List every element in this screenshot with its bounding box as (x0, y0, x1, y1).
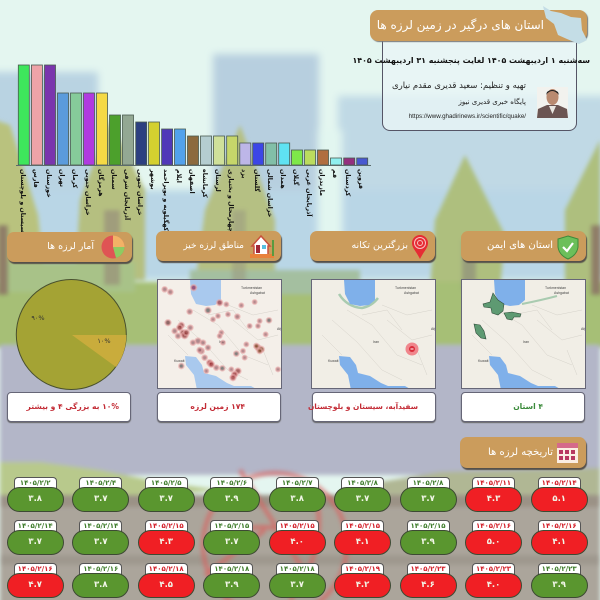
bar chart: earthquakes by province: لرستان (214, 169, 221, 192)
row 3: ۴.۷ (28, 580, 42, 590)
header: seismic zones: مناطق لرزه خیز (183, 241, 244, 251)
row 2: ۴.۱ (356, 537, 369, 547)
row 2: ۳.۷ (94, 537, 108, 547)
map: seismic zones: Turkmenistan (241, 286, 262, 290)
row 3: ۴.۶ (421, 580, 435, 590)
map: safe provinces (461, 279, 586, 389)
row 1: ۱۴۰۵/۲/۸ (413, 478, 443, 486)
row 3: ۱۴۰۵/۲/۱۹ (345, 565, 380, 573)
row 2: ۴.۰ (290, 537, 304, 547)
row 1: ۳.۷ (421, 494, 435, 504)
row 3: ۱۴۰۵/۲/۲۳ (410, 565, 446, 573)
result: stats: ۱۰% به بزرگی ۴ و بیشتر (27, 402, 119, 411)
header: quake history: تاریخچه لرزه ها (488, 447, 553, 458)
credit line: url: https://www.ghadirinews.ir/scientific/quake/ (409, 113, 526, 120)
result: biggest shock place: سفیدآبه، سیستان و بلوچستان (308, 402, 418, 411)
map: safe provinces: Kuwait (478, 359, 489, 363)
header: biggest shock (310, 231, 435, 261)
header: biggest shock: بزرگترین تکانه (351, 240, 408, 251)
icon: location pin (412, 235, 428, 259)
row 2: ۳.۷ (225, 537, 239, 547)
row 2 (7, 520, 588, 555)
row 1 (7, 477, 588, 512)
row 2: ۳.۷ (28, 537, 42, 547)
map: safe provinces: Ashgabat (554, 291, 569, 295)
row 3 (7, 563, 588, 598)
header: quake history (460, 437, 586, 468)
result: seismic count (157, 392, 281, 422)
pie chart: magnitude share: ۹۰% (31, 314, 45, 322)
row 1: ۳.۸ (290, 494, 304, 504)
bar chart: earthquakes by province: گلستان (253, 169, 261, 192)
row 2: ۵.۰ (487, 537, 500, 547)
bar chart: earthquakes by province: ایلام (175, 169, 182, 183)
header: quake stats (7, 232, 132, 262)
bar chart: earthquakes by province: قزوین (357, 169, 364, 189)
row 1: ۳.۷ (356, 494, 369, 504)
row 3: ۳.۹ (552, 580, 566, 590)
row 2: ۱۴۰۵/۲/۱۵ (410, 522, 446, 530)
row 1: ۱۴۰۵/۲/۵ (151, 478, 182, 486)
map: biggest shock epicentre: Ashgabat (404, 291, 419, 295)
result: safe province count (461, 392, 585, 422)
map: seismic zones: Kuwait (174, 359, 185, 363)
bar chart: earthquakes by province: تهران (58, 169, 65, 187)
history grid: daily quake magnitudes (7, 477, 588, 598)
header: quake stats: آمار لرزه ها (47, 241, 94, 252)
result: stats (7, 392, 131, 422)
header: safe provinces: استان های ایمن (487, 240, 553, 251)
bar chart: earthquakes by province: قم (331, 169, 338, 178)
bar chart: earthquakes by province: خوزستان (45, 169, 52, 198)
bar chart: earthquakes by province (16, 64, 371, 233)
bar chart: earthquakes by province: کهگیلویه و بویراحمد (162, 169, 170, 232)
pie chart: magnitude share: ۱۰% (97, 337, 111, 345)
row 2: ۳.۹ (421, 537, 435, 547)
row 1: ۱۴۰۵/۲/۲ (20, 478, 51, 486)
bar chart: earthquakes by province: چهارمحال و بختیاری (227, 169, 234, 232)
bar chart: earthquakes by province: فارس (32, 169, 39, 188)
pie chart: magnitude share (16, 279, 127, 390)
result: seismic count: ۱۷۴ زمین لرزه (190, 402, 245, 411)
row 1: ۱۴۰۵/۲/۴ (85, 478, 116, 486)
title banner: استان های درگیر در زمین لرزه ها (377, 18, 544, 32)
row 2: ۱۴۰۵/۲/۱۵ (280, 522, 315, 530)
bar chart: earthquakes by province: خراسان جنوبی (136, 169, 143, 216)
row 3: ۱۴۰۵/۲/۱۶ (18, 565, 53, 573)
bar chart: earthquakes by province: یزد (240, 169, 247, 179)
row 3: ۳.۷ (290, 580, 304, 590)
row 2: ۴.۳ (159, 537, 173, 547)
bar chart: earthquakes by province: مازندران (318, 169, 325, 196)
result: biggest shock place (312, 392, 436, 422)
row 3: ۴.۲ (356, 580, 369, 590)
map: safe provinces: Turkmenistan (545, 286, 566, 290)
row 2: ۱۴۰۵/۲/۱۵ (345, 522, 380, 530)
map: safe provinces: Iran (523, 340, 529, 344)
header: seismic zones (156, 231, 281, 261)
row 2: ۱۴۰۵/۲/۱۴ (18, 522, 53, 530)
row 1: ۱۴۰۵/۲/۶ (216, 478, 247, 486)
bar chart: earthquakes by province: هرمزگان (97, 169, 105, 196)
bar chart: earthquakes by province: همدان (279, 169, 286, 189)
row 1: ۳.۷ (159, 494, 173, 504)
row 1: ۱۴۰۵/۲/۸ (347, 478, 378, 486)
header: safe provinces (461, 231, 586, 261)
map: seismic zones: Ashgabat (250, 291, 265, 295)
row 1: ۱۴۰۵/۲/۷ (282, 478, 313, 486)
map: biggest shock epicentre: Turkmenistan (395, 286, 416, 290)
bar chart: earthquakes by province: بوشهر (149, 168, 156, 190)
row 1: ۵.۱ (552, 494, 566, 504)
title banner (370, 10, 587, 41)
info panel (382, 38, 577, 131)
icon: calendar (557, 443, 578, 463)
row 3: ۱۴۰۵/۲/۱۶ (83, 565, 118, 573)
bar chart: earthquakes by province: خراسان جنوبی (84, 169, 91, 216)
row 2: ۱۴۰۵/۲/۱۶ (476, 522, 511, 530)
row 3: ۴.۵ (159, 580, 173, 590)
row 3: ۱۴۰۵/۲/۱۸ (280, 565, 315, 573)
portrait (537, 87, 568, 118)
row 3: ۱۴۰۵/۲/۱۸ (149, 565, 184, 573)
row 1: ۴.۳ (487, 494, 500, 504)
map: seismic zones: Iran (219, 340, 225, 344)
row 1: ۳.۹ (225, 494, 239, 504)
bar chart: earthquakes by province: کرمانشاه (201, 169, 208, 198)
row 2: ۱۴۰۵/۲/۱۵ (214, 522, 249, 530)
bar chart: earthquakes by province: سیستان و بلوچستان (19, 169, 26, 233)
icon: house (250, 235, 274, 258)
row 1: ۳.۸ (28, 494, 42, 504)
row 2: ۱۴۰۵/۲/۱۶ (542, 522, 577, 530)
bar chart: earthquakes by province: سمنان (110, 169, 117, 190)
credit line: author: تهیه و تنظیم: سعید قدیری مقدم نیاری (392, 81, 526, 91)
icon: shield (558, 236, 578, 260)
bar chart: earthquakes by province: گیلان (292, 169, 300, 186)
bar chart: earthquakes by province: آذربایجان شرقی (123, 169, 132, 221)
row 3: ۳.۹ (225, 580, 239, 590)
date range line: سه‌شنبه ۱ اردیبهشت ۱۴۰۵ لغایت پنجشنبه ۳۱ اردیبهشت ۱۴۰۵ (352, 56, 590, 65)
row 2: ۱۴۰۵/۲/۱۴ (83, 522, 118, 530)
row 1: ۱۴۰۵/۲/۱۱ (476, 478, 511, 486)
bar chart: earthquakes by province: کردستان (344, 169, 351, 197)
bar chart: earthquakes by province: اصفهان (188, 169, 195, 194)
map: seismic zones (157, 279, 282, 389)
row 1: ۱۴۰۵/۲/۱۴ (542, 478, 577, 486)
map: biggest shock epicentre (311, 279, 436, 389)
row 2: ۴.۱ (552, 537, 566, 547)
map: biggest shock epicentre: Iran (373, 340, 379, 344)
row 3: ۱۴۰۵/۲/۱۸ (214, 565, 249, 573)
row 3: ۱۴۰۵/۲/۲۳ (476, 565, 511, 573)
row 3: ۱۴۰۵/۲/۲۳ (542, 565, 577, 573)
bar chart: earthquakes by province: خراسان شمالی (266, 169, 273, 217)
bar chart: earthquakes by province: آذربایجان غربی (305, 169, 314, 217)
icon: pie chart (102, 236, 124, 258)
row 3: ۳.۸ (94, 580, 108, 590)
bar chart: earthquakes by province: کرمان (71, 169, 78, 189)
credit line: agency: پایگاه خبری قدیری نیوز (458, 98, 526, 106)
icon: Iran map (543, 6, 587, 44)
row 1: ۳.۷ (94, 494, 108, 504)
map: biggest shock epicentre: Kuwait (328, 359, 339, 363)
row 3: ۴.۰ (487, 580, 500, 590)
result: safe province count: ۴ استان (513, 402, 543, 411)
row 2: ۱۴۰۵/۲/۱۵ (149, 522, 184, 530)
